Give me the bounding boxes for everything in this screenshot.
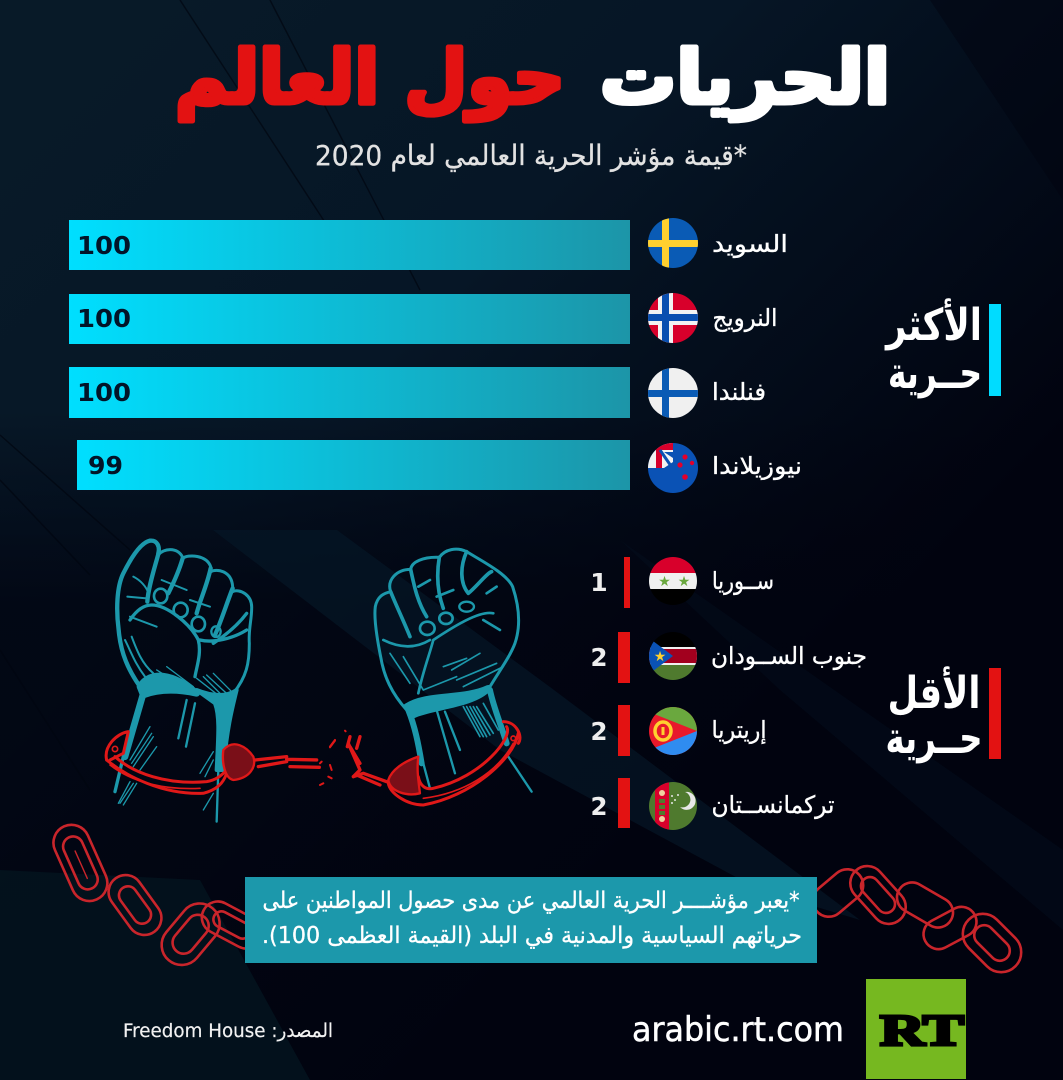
country name: Eritrea: إريتريا [712,716,766,745]
flag: New Zealand [648,443,698,493]
country name: Norway: النرويج [712,304,778,332]
flag: Sweden [648,218,698,268]
bar: Norway 100 [69,294,630,344]
title [175,35,890,122]
bar: New Zealand 99 [77,440,630,490]
title: الحريات [600,35,890,121]
bar: Norway 100: 100 [77,304,131,333]
right fist [375,549,532,792]
footnote box: حرياتهم السياسية والمدنية في البلد (القيمة العظمى 100). [262,923,802,949]
country name: New Zealand: نيوزيلاندا [712,452,802,480]
illustration: raised fists with broken handcuffs [106,541,532,822]
illustration: right chain [806,859,1029,980]
logo: RT: RT [880,1006,964,1055]
label: least free: حــرية [886,713,982,764]
country name: Sweden: السويد [712,230,788,258]
bar: Finland 100 [69,367,630,418]
label: most free: حــرية [888,348,982,399]
bar: Sweden 100: 100 [77,231,131,260]
country name: Syria: ســوريا [712,567,774,595]
bar: New Zealand 99: 99 [88,451,123,480]
flag: Syria: ★ [658,574,671,590]
subtitle: *قيمة مؤشر الحرية العالمي لعام 2020 [315,139,747,172]
country name: South Sudan: جنوب الســودان [711,642,867,670]
bottom value: South Sudan 2: 2 [590,643,608,672]
flag: South Sudan [649,632,697,680]
bottom value: Syria 1 [590,557,630,608]
flag: Norway [648,293,698,343]
website: arabic.rt.com [632,1010,844,1050]
country name: Turkmenistan: تركمانســتان [712,791,834,819]
source: المصدر: Freedom House [123,1020,333,1042]
bottom value: Eritrea 2: 2 [590,717,608,746]
flag: Syria: ★ [678,574,690,590]
label: most free: الأكثر [884,298,982,351]
illustration: left chain [48,819,268,973]
bottom value: South Sudan 2 [590,632,630,683]
country name: Finland: فنلندا [712,378,766,406]
bottom value: Syria 1: 1 [590,568,608,597]
footnote box [245,877,817,963]
bottom value: Turkmenistan 2: 2 [590,792,608,821]
footnote box: *يعبر مؤشــــر الحرية العالمي عن مدى حصول المواطنين على [262,888,800,914]
bottom value: Turkmenistan 2 [590,778,630,828]
label: least free [886,666,1001,764]
left handcuff [106,732,335,793]
flag: Eritrea [649,707,697,755]
logo: RT [866,979,966,1079]
flag: South Sudan: ★ [654,649,666,665]
flag: Finland [648,368,698,418]
bar: Sweden 100 [69,220,630,270]
title: حول العالم [175,35,565,122]
left fist [115,541,252,822]
flag: Syria [649,557,697,605]
bottom value: Eritrea 2 [590,705,630,756]
label: least free: الأقل [888,666,980,719]
label: most free [884,298,1001,399]
bar: Finland 100: 100 [77,378,131,407]
right handcuff [330,722,520,805]
flag: Turkmenistan [649,782,697,830]
